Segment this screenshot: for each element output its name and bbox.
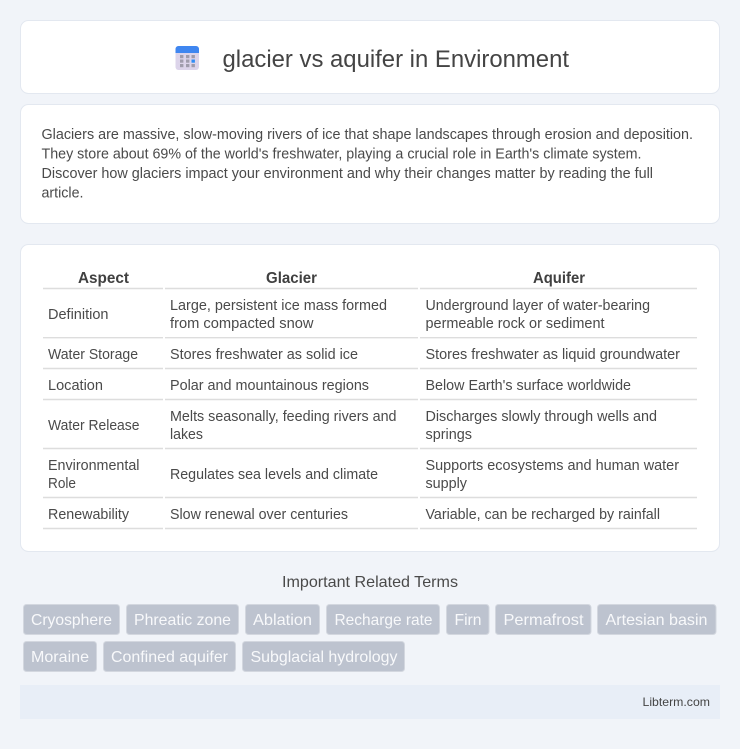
table header: Glacier (266, 270, 317, 287)
row: water release: Water Release (48, 418, 140, 434)
table header (78, 270, 585, 287)
row: environmental role: Regulates sea levels and climate (170, 467, 378, 483)
tags: related terms: Phreatic zone (134, 612, 231, 629)
row: water storage (48, 347, 680, 363)
tags: related terms: Confined aquifer (111, 649, 229, 666)
footer credit: Libterm.com (642, 695, 710, 709)
row: renewability: Variable, can be recharged by rainfall (426, 507, 660, 523)
row: renewability: Renewability (48, 507, 130, 523)
row: renewability (48, 507, 660, 523)
row: environmental role: supply (426, 476, 468, 492)
row: renewability: Slow renewal over centuries (170, 507, 348, 523)
row: water release (48, 409, 657, 443)
icon: calendar (176, 46, 199, 70)
row: location (48, 378, 631, 394)
tags: related terms: Subglacial hydrology (250, 649, 398, 666)
panel: header (20, 20, 720, 94)
row: definition: Underground layer of water-bearing (426, 298, 650, 314)
title: glacier vs aquifer in Environment (222, 46, 569, 73)
panel: intro (20, 104, 720, 224)
row: water storage: Stores freshwater as solid ice (170, 347, 358, 363)
table header: Aspect (78, 270, 129, 287)
table header: Aquifer (533, 270, 585, 287)
text block: intro paragraph (42, 127, 693, 201)
tags: related terms: Artesian basin (606, 612, 708, 629)
row: location: Polar and mountainous regions (170, 378, 369, 394)
tags: related terms: Moraine (31, 649, 89, 666)
row: environmental role (48, 458, 679, 492)
tags: related terms (24, 604, 716, 672)
panel: comparison table (20, 244, 720, 552)
row: water storage: Stores freshwater as liquid groundwater (426, 347, 680, 363)
row: water storage: Water Storage (48, 347, 138, 363)
tags: related terms: Firn (454, 612, 482, 629)
footer (20, 685, 720, 719)
row: definition: from compacted snow (170, 316, 314, 332)
row: water release: Melts seasonally, feeding rivers and (170, 409, 396, 425)
row: environmental role: Environmental (48, 458, 140, 474)
row: environmental role: Role (48, 476, 76, 492)
row: definition: Definition (48, 307, 108, 323)
text block: intro paragraph: Discover how glaciers impact your environment and why their changes matter by reading the full (42, 166, 653, 182)
row: water release: springs (426, 427, 472, 443)
text block: intro paragraph: article. (42, 185, 84, 201)
tags: related terms: Cryosphere (31, 612, 112, 629)
row: water release: Discharges slowly through wells and (426, 409, 657, 425)
row: water release: lakes (170, 427, 203, 443)
row: definition (48, 298, 650, 332)
text block: intro paragraph: They store about 69% of the world's freshwater, playing a crucial role in Earth's climate system. (42, 146, 642, 162)
tags: related terms: Recharge rate (334, 612, 433, 629)
row: environmental role: Supports ecosystems and human water (426, 458, 679, 474)
heading: related terms: Important Related Terms (282, 574, 458, 591)
row: location: Below Earth's surface worldwide (426, 378, 631, 394)
tags: related terms: Permafrost (504, 612, 584, 629)
tags: related terms: Ablation (253, 612, 312, 629)
row: location: Location (48, 378, 103, 394)
text block: intro paragraph: Glaciers are massive, slow-moving rivers of ice that shape landscapes through erosion and deposition. (42, 127, 693, 143)
row: definition: Large, persistent ice mass formed (170, 298, 387, 314)
row: definition: permeable rock or sediment (426, 316, 604, 332)
